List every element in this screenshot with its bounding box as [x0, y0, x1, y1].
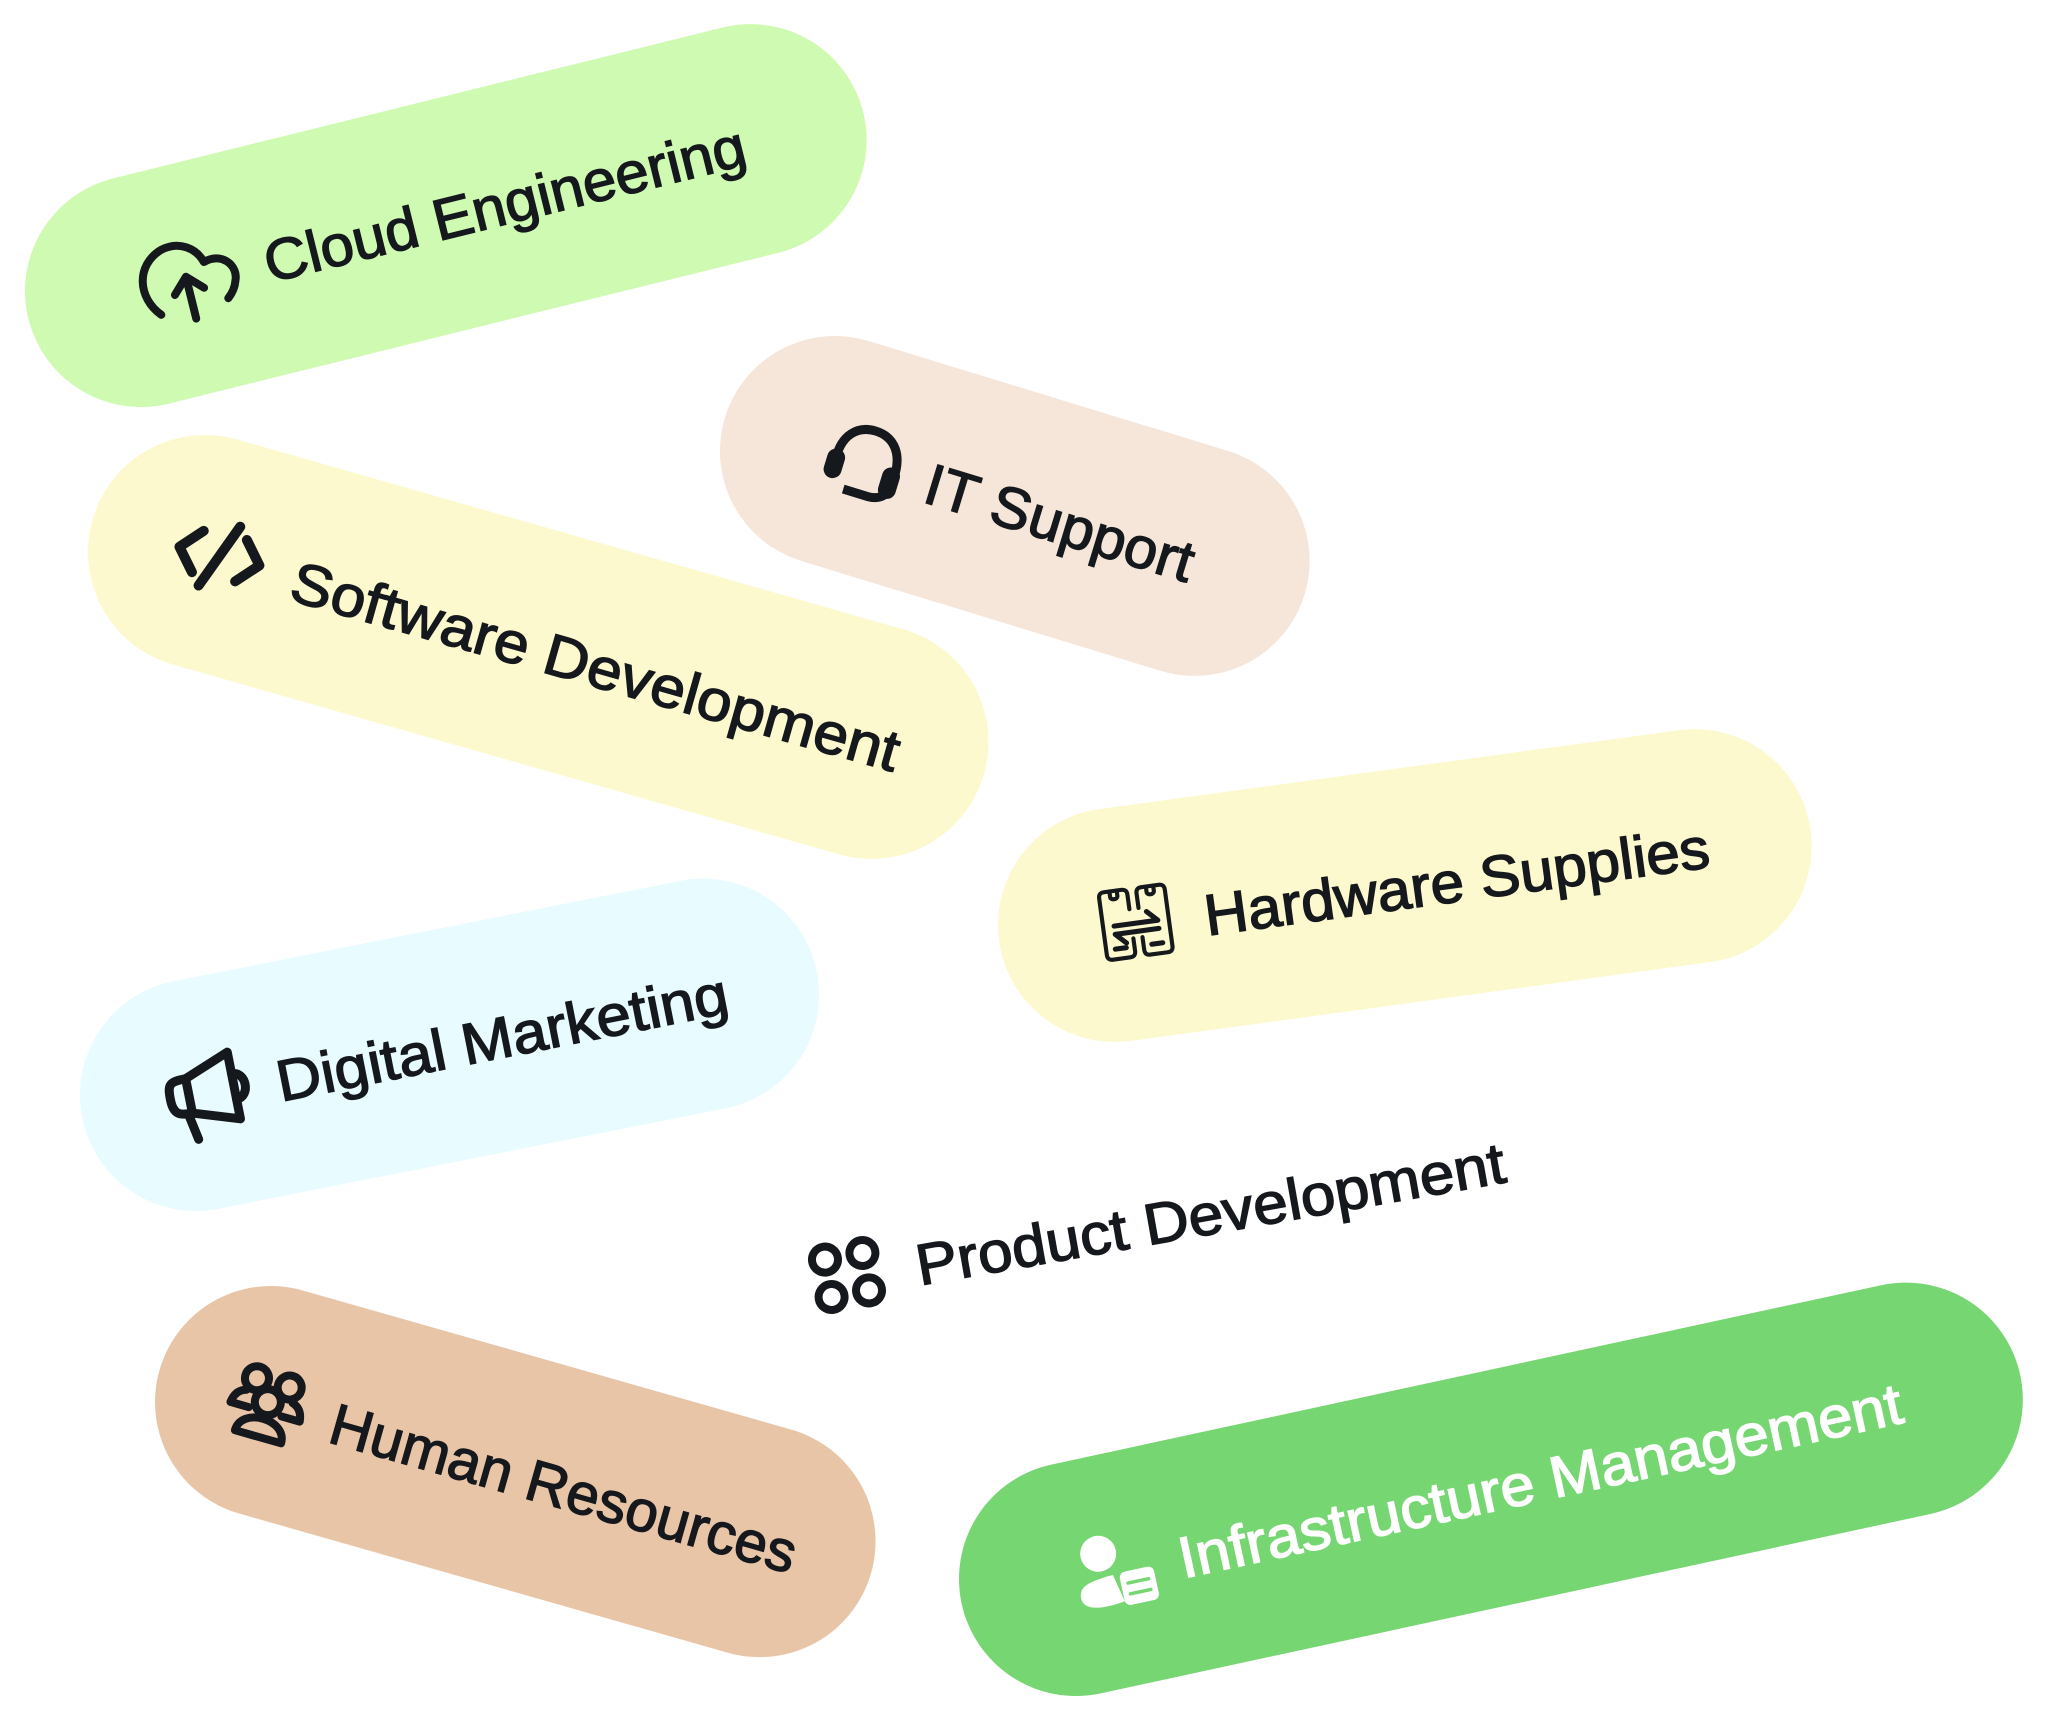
label: IT Support: IT Support	[917, 452, 1202, 595]
label: Human Resources: Human Resources	[323, 1392, 804, 1586]
icon: team of people	[223, 1362, 311, 1447]
icon: four circles	[810, 1238, 884, 1312]
pill: Cloud Engineering	[1, 0, 891, 431]
pill: Human Resources	[128, 1259, 903, 1685]
pill: Hardware Supplies	[983, 714, 1826, 1057]
label: Software Development: Software Development	[284, 549, 907, 784]
pill: Infrastructure Management	[937, 1261, 2045, 1718]
icon: headset	[823, 421, 907, 503]
label: Cloud Engineering: Cloud Engineering	[257, 114, 752, 295]
icon: cloud upload	[135, 233, 244, 329]
icon: person with card	[1069, 1525, 1160, 1615]
icon: hardware devices	[1098, 884, 1173, 960]
label: Infrastructure Management: Infrastructure Management	[1172, 1371, 1908, 1591]
pill: Software Development	[60, 407, 1016, 886]
pill: IT Support	[691, 307, 1338, 705]
icon: code brackets	[171, 512, 268, 600]
label: Product Development: Product Development	[911, 1131, 1510, 1298]
label: Hardware Supplies: Hardware Supplies	[1200, 815, 1713, 949]
icon: megaphone	[164, 1050, 254, 1143]
pill: Digital Marketing	[60, 858, 839, 1231]
item: Product Development	[810, 1128, 1510, 1316]
label: Digital Marketing: Digital Marketing	[271, 961, 734, 1114]
